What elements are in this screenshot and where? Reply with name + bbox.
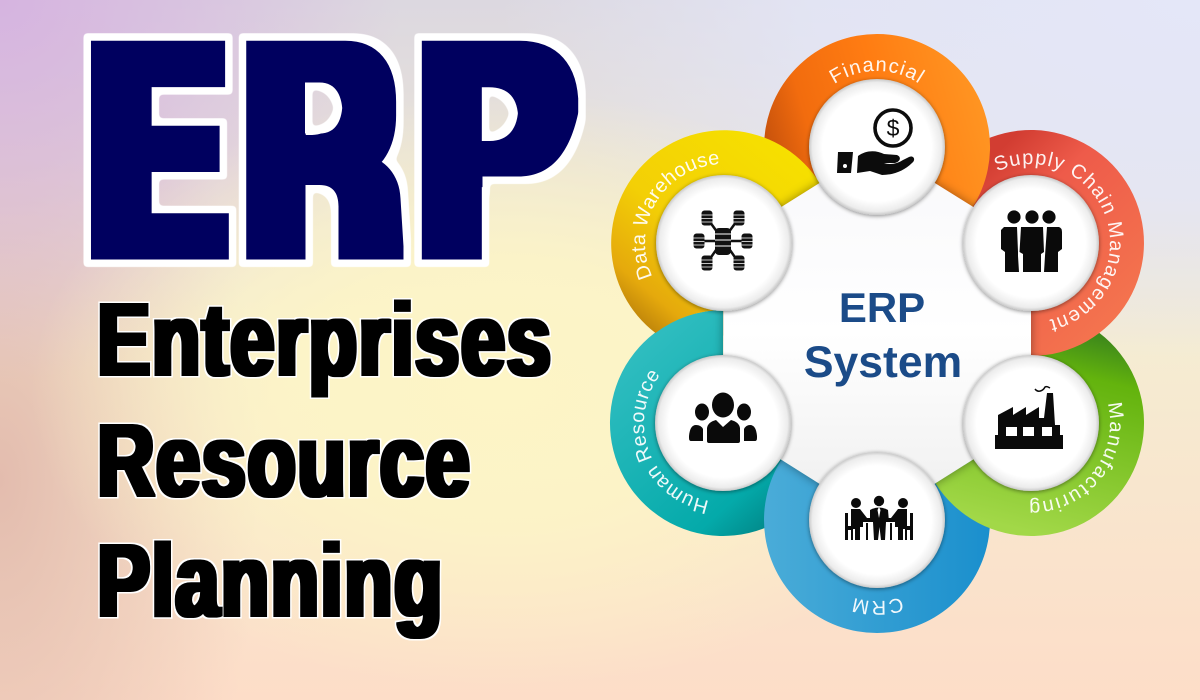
node: manufacturing [963, 355, 1099, 491]
centre label line 2: System [804, 338, 962, 387]
subtitle line 3: Planning [98, 524, 444, 638]
centre label line 1: ERP [839, 284, 925, 331]
node circle [655, 355, 791, 491]
subtitle line 2: Resource [98, 404, 471, 518]
node: data warehouse [656, 175, 792, 311]
node: financial [809, 79, 945, 215]
icon: three people [1001, 210, 1062, 272]
segment: data warehouse [611, 130, 820, 333]
centre label: ERP System [804, 284, 962, 387]
label: Supply Chain Management: Supply Chain Management [994, 152, 1124, 332]
label: Financial: Financial [828, 60, 926, 84]
node circle [963, 355, 1099, 491]
label: CRM: CRM [852, 598, 902, 615]
segment: supply chain management [935, 130, 1144, 356]
node circle [963, 175, 1099, 311]
title: ERP [83, 33, 586, 268]
subtitle: Enterprises Resource Planning [98, 283, 553, 638]
node: supply chain [963, 175, 1099, 311]
segment: manufacturing [935, 310, 1144, 536]
icon: meeting [845, 496, 913, 540]
node circle [656, 175, 792, 311]
segment: human resource [610, 310, 819, 536]
node: human resource [655, 355, 791, 491]
segment: CRM [764, 460, 990, 633]
ring labels [632, 60, 1124, 615]
node circle [809, 79, 945, 215]
label: Data Warehouse: Data Warehouse [632, 154, 718, 280]
subtitle line 1: Enterprises [98, 283, 553, 397]
icon: factory [995, 387, 1063, 449]
central hexagon [723, 147, 1031, 520]
ERP wheel diagram [610, 34, 1144, 633]
segment: financial [764, 34, 990, 207]
node circle [809, 452, 945, 588]
icon: money in hand: $ [887, 115, 900, 141]
node: CRM [809, 452, 945, 588]
label: Human Resource: Human Resource [633, 371, 708, 514]
icon: database network [694, 210, 752, 270]
icon: people group [689, 392, 757, 443]
label: Manufacturing: Manufacturing [1030, 402, 1124, 513]
letter R [238, 33, 412, 268]
